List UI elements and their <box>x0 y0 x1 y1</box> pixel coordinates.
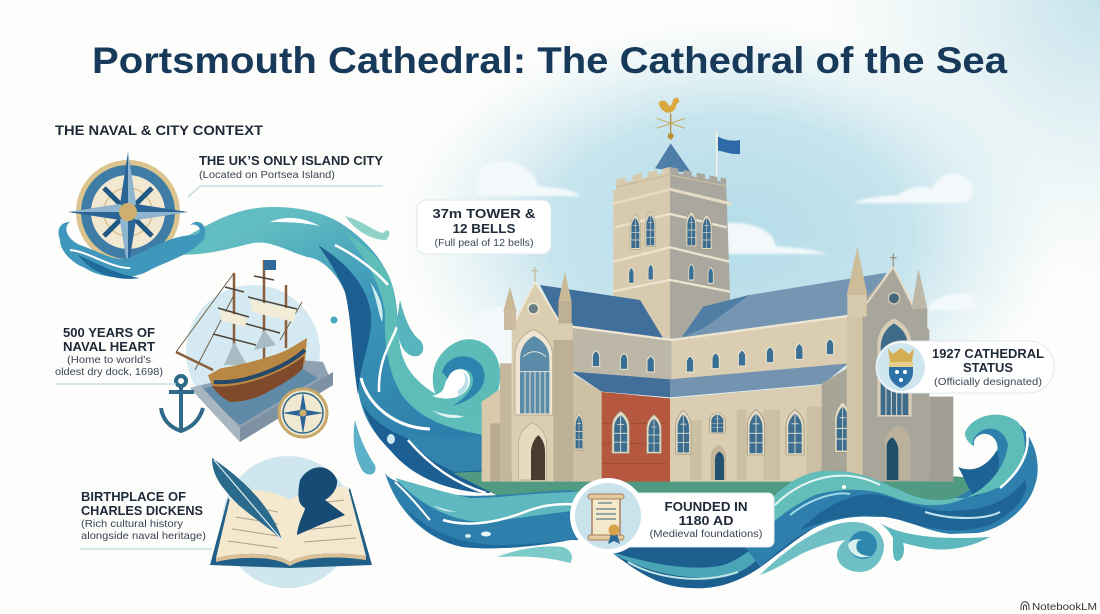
text: birthplace of Charles Dickens: (Rich cultural history <box>81 518 184 530</box>
icon: anchor <box>161 376 203 431</box>
icon: ship in dry dock <box>176 260 333 442</box>
lower walls <box>598 385 823 482</box>
west front <box>482 267 602 482</box>
callout heading: bells: 12 BELLS <box>452 221 516 236</box>
text: birthplace of Charles Dickens: CHARLES DICKENS <box>81 503 203 518</box>
title: Portsmouth Cathedral: The Cathedral of the Sea <box>92 40 1007 81</box>
callout detail: designated: (Officially designated) <box>934 376 1042 388</box>
small teal wave tail <box>497 546 572 563</box>
text: 500 years of naval heart: 500 YEARS OF <box>63 325 155 340</box>
icon: charter scroll <box>570 478 646 554</box>
text: 500 years of naval heart: oldest dry dock, 1698) <box>55 366 163 378</box>
watermark: NotebookLM <box>1032 601 1097 613</box>
text: 500 years of naval heart <box>55 325 163 378</box>
text: UK's only island city: (Located on Portsea Island) <box>199 169 335 181</box>
callout heading: status: STATUS <box>963 360 1013 375</box>
clouds <box>470 161 975 360</box>
text: 500 years of naval heart: NAVAL HEART <box>63 339 155 354</box>
nave roof <box>540 273 887 338</box>
leader line: Dickens <box>80 548 212 550</box>
clerestory walls <box>572 316 848 380</box>
centre wave band <box>600 490 830 588</box>
wave drips <box>330 216 423 475</box>
icon: crown and shield <box>877 343 925 391</box>
upper wave sweeping from compass <box>150 207 490 493</box>
lawn <box>453 470 975 502</box>
panel: 37m tower and bells callout <box>417 200 551 254</box>
icon: open book, quill and Dickens silhouette <box>210 456 372 588</box>
section heading: naval and city context: THE NAVAL & CITY CONTEXT <box>55 123 264 138</box>
icon: small compass <box>279 389 327 437</box>
tower <box>612 143 732 338</box>
text: 500 years of naval heart: (Home to world's <box>67 354 151 366</box>
hull <box>208 338 307 402</box>
panel: founded in 1180 callout <box>570 478 774 554</box>
weathervane <box>657 98 685 140</box>
flag <box>717 132 740 179</box>
leader line: island city <box>188 186 383 197</box>
callout detail: medieval: (Medieval foundations) <box>650 528 762 540</box>
text: UK's only island city: THE UK’S ONLY ISLAND CITY <box>199 153 383 168</box>
aisle roof <box>572 363 848 397</box>
callout heading: 1180 AD: 1180 AD <box>678 513 734 528</box>
callout heading: founded: FOUNDED IN <box>664 499 748 514</box>
icon: compass rose on waves <box>58 152 205 279</box>
east front <box>822 247 953 482</box>
dry dock <box>190 360 333 442</box>
text: birthplace of Charles Dickens <box>81 489 206 542</box>
text: birthplace of Charles Dickens: BIRTHPLACE OF <box>81 489 186 504</box>
text: birthplace of Charles Dickens: alongside naval heritage) <box>81 530 206 542</box>
callout detail: bells: (Full peal of 12 bells) <box>434 237 534 249</box>
lower swirl <box>760 522 884 575</box>
cathedral illustration <box>482 98 953 482</box>
teal wave tail right <box>880 523 990 561</box>
leader line: naval heart <box>55 383 176 385</box>
callout heading: 1927: 1927 CATHEDRAL <box>932 346 1044 361</box>
rigging <box>176 273 302 370</box>
panel: 1927 cathedral status callout <box>876 341 1054 393</box>
text: UK's only island city <box>199 153 383 181</box>
wave curl beside west front <box>432 339 500 420</box>
lower-left wave band <box>385 473 640 548</box>
callout heading: tower: 37m TOWER & <box>432 206 536 221</box>
right wave with curl <box>740 415 1038 567</box>
